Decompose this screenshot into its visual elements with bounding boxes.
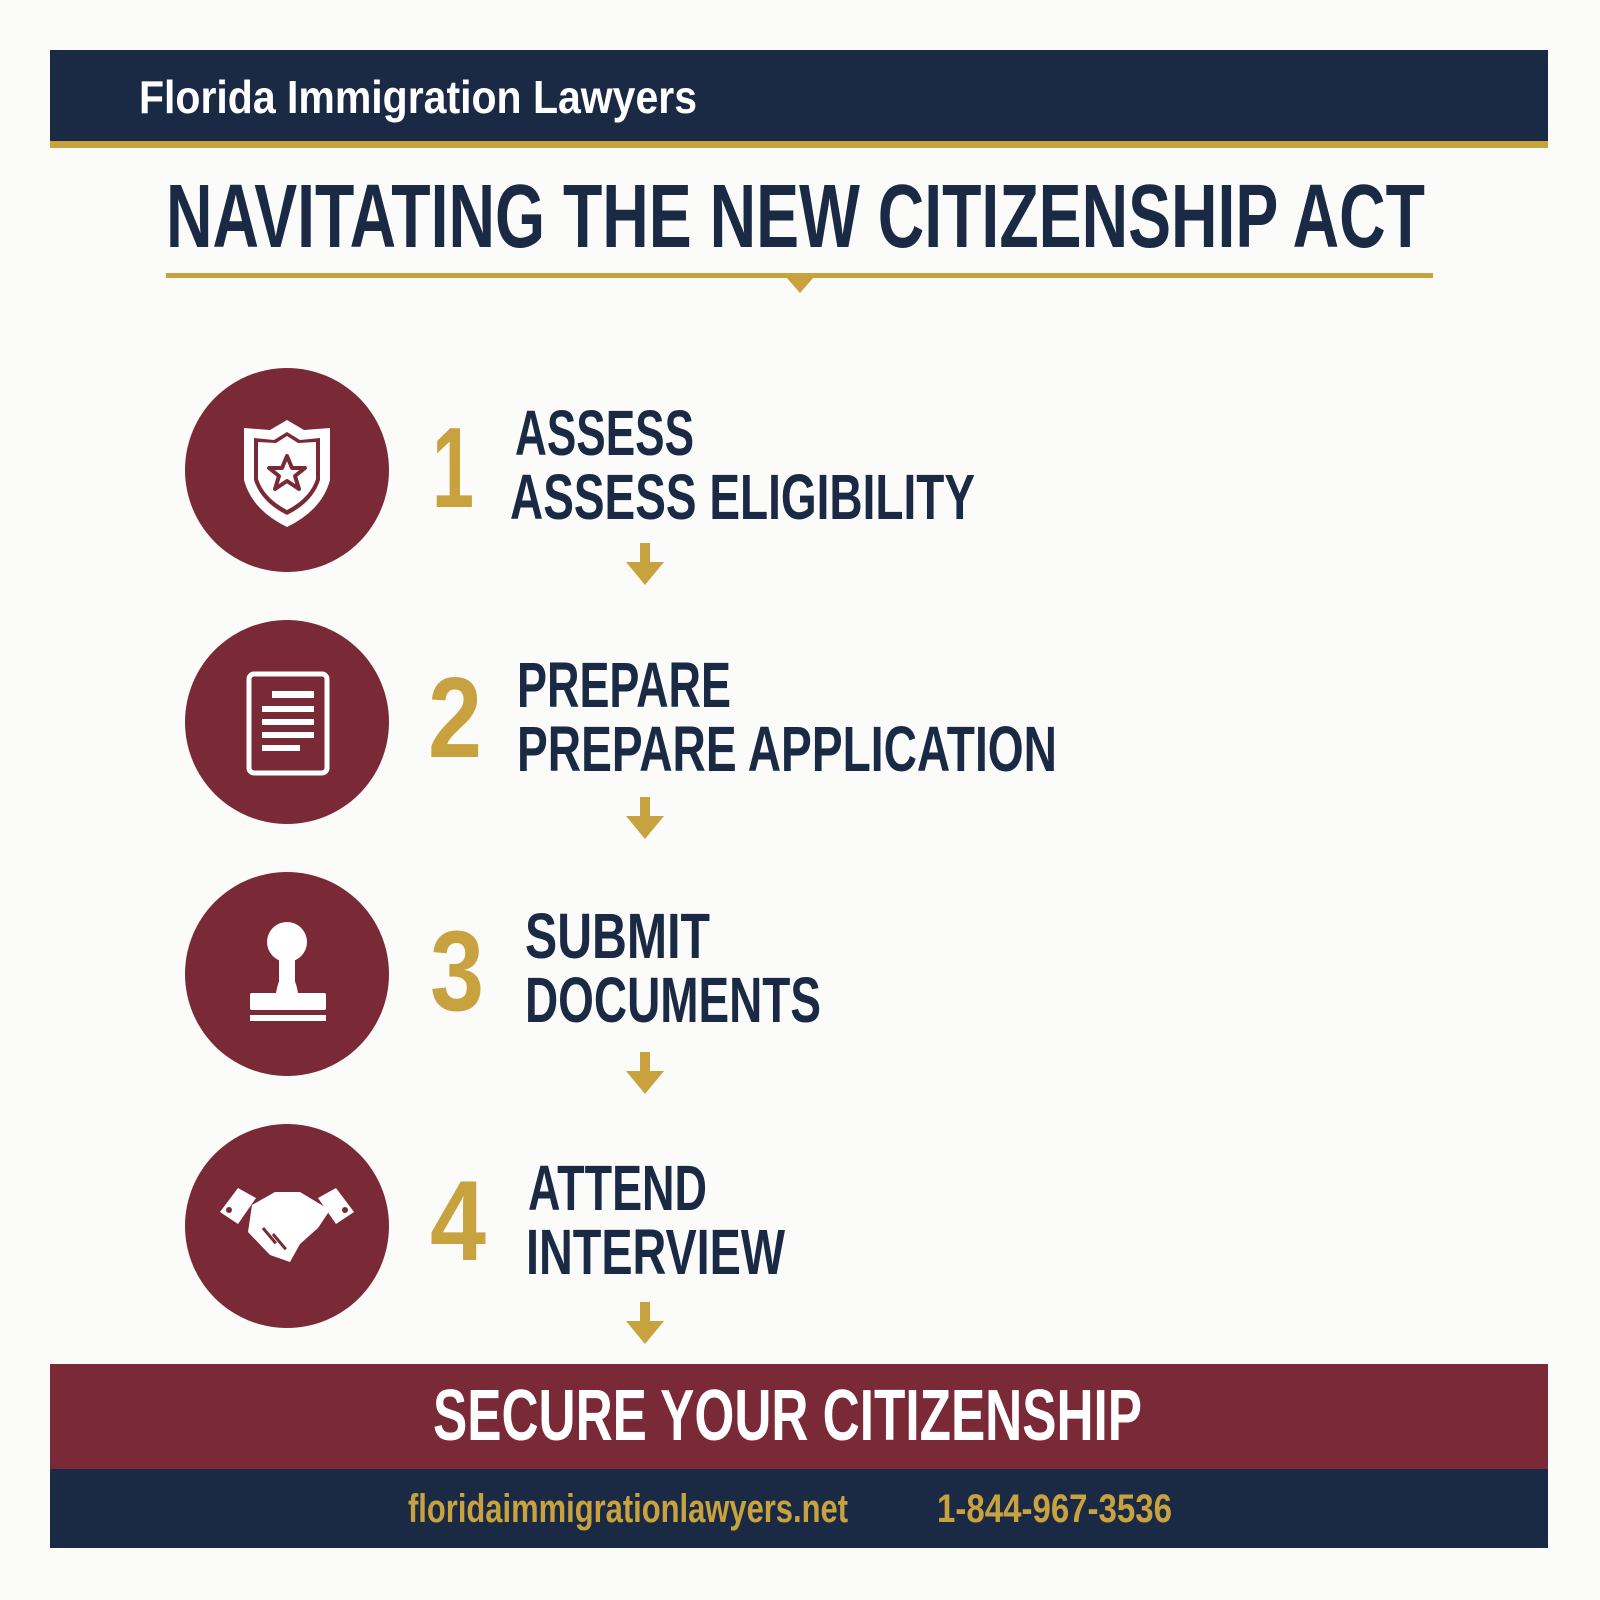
website: floridaimmigrationlawyers.net <box>408 1487 848 1531</box>
header bar <box>50 50 1548 148</box>
step 4: INTERVIEW <box>526 1216 785 1288</box>
number 3: 3 <box>430 908 484 1035</box>
step 2 text: PREPARE <box>517 649 731 721</box>
step 1: ASSESS ELIGIBILITY <box>510 461 975 533</box>
number 1: 1 <box>432 405 474 532</box>
step 3 <box>185 872 821 1076</box>
arrow 4 <box>626 1302 664 1344</box>
arrow 3 <box>626 1052 664 1094</box>
header text: Florida Immigration Lawyers <box>139 71 697 123</box>
step 4 <box>185 1124 785 1328</box>
icon: handshake <box>185 1124 389 1328</box>
number 4: 4 <box>430 1158 486 1285</box>
step 1 <box>185 368 975 572</box>
number 2: 2 <box>428 655 482 782</box>
arrow 1 <box>626 543 664 585</box>
step 3: DOCUMENTS <box>525 964 821 1036</box>
arrow 2 <box>626 797 664 839</box>
step 2 <box>185 620 1057 824</box>
step 3 text: SUBMIT <box>525 900 710 972</box>
step 4 text: ATTEND <box>528 1152 707 1224</box>
icon: stamp <box>185 872 389 1076</box>
banner: secure your citizenship: SECURE YOUR CITIZENSHIP <box>433 1376 1142 1456</box>
icon: document <box>185 620 389 824</box>
banner: secure your citizenship <box>50 1364 1548 1470</box>
step 1 text: ASSESS <box>515 397 694 469</box>
phone: 1-844-967-3536 <box>937 1487 1172 1531</box>
step 2: PREPARE APPLICATION <box>517 713 1057 785</box>
icon: shield with star <box>185 368 389 572</box>
footer <box>50 1469 1548 1548</box>
